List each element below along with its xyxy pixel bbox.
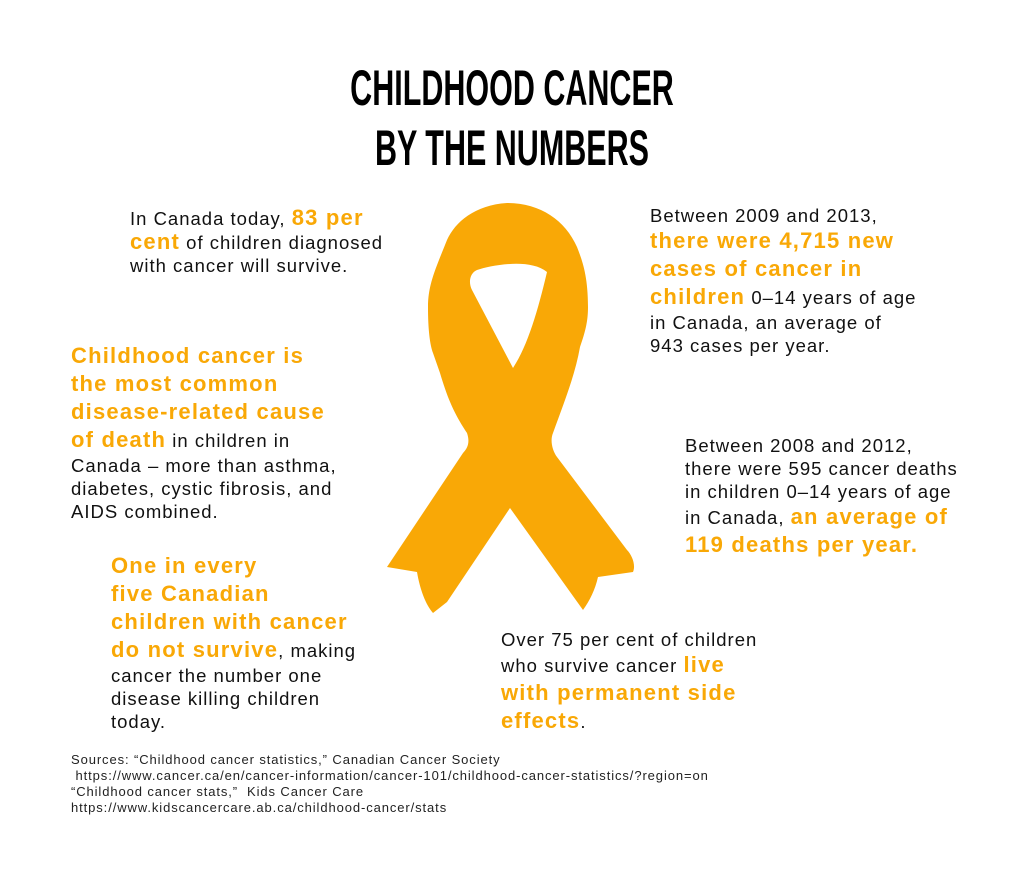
text: 4,715 cases: 943 cases per year. — [650, 335, 830, 356]
text: 595 deaths: Between 2008 and 2012, — [685, 435, 913, 456]
text: 595 deaths — [685, 435, 958, 557]
text: 75 per cent: with permanent side — [501, 680, 737, 705]
text: 4,715 cases: there were 4,715 new — [650, 228, 894, 253]
text: 83 per cent: In Canada today, 83 per — [130, 205, 364, 230]
text: 595 deaths: 119 deaths per year. — [685, 532, 918, 557]
text: 4,715 cases: in Canada, an average of — [650, 312, 882, 333]
text: one in five: One in every — [111, 553, 257, 578]
text: most common cause of death — [71, 343, 337, 522]
text: 75 per cent: Over 75 per cent of children — [501, 629, 757, 650]
title: CHILDHOOD CANCER — [350, 60, 674, 116]
text: most common cause of death: AIDS combined. — [71, 501, 219, 522]
text: 595 deaths: in Canada, an average of — [685, 504, 948, 529]
text: 83 per cent: with cancer will survive. — [130, 255, 348, 276]
text: 4,715 cases — [650, 205, 916, 356]
text: 75 per cent: effects. — [501, 708, 586, 733]
title — [350, 60, 674, 176]
text: one in five: today. — [111, 711, 166, 732]
text: 595 deaths: in children 0–14 years of age — [685, 481, 952, 502]
text: 4,715 cases: Between 2009 and 2013, — [650, 205, 878, 226]
sources: “Childhood cancer stats,” Kids Cancer Care — [71, 784, 364, 799]
text: most common cause of death: of death in children in — [71, 427, 290, 452]
text: one in five: disease killing children — [111, 688, 320, 709]
text: 4,715 cases: cases of cancer in — [650, 256, 862, 281]
text: 83 per cent: cent of children diagnosed — [130, 229, 383, 254]
text: most common cause of death: diabetes, cystic fibrosis, and — [71, 478, 332, 499]
title: BY THE NUMBERS — [375, 120, 649, 176]
text: one in five: cancer the number one — [111, 665, 322, 686]
sources: https://www.cancer.ca/en/cancer-information/cancer-101/childhood-cancer-statistics/?region=on — [76, 768, 709, 783]
sources — [71, 752, 709, 815]
text: one in five: do not survive, making — [111, 637, 356, 662]
text: 75 per cent: who survive cancer live — [501, 652, 725, 677]
text: most common cause of death: Canada – more than asthma, — [71, 455, 337, 476]
sources: Sources: “Childhood cancer statistics,” Canadian Cancer Society — [71, 752, 501, 767]
text: 595 deaths: there were 595 cancer deaths — [685, 458, 958, 479]
text: 83 per cent — [130, 205, 383, 276]
sources: https://www.kidscancercare.ab.ca/childhood-cancer/stats — [71, 800, 447, 815]
text: most common cause of death: the most common — [71, 371, 278, 396]
text: most common cause of death: Childhood cancer is — [71, 343, 304, 368]
text: most common cause of death: disease-related cause — [71, 399, 325, 424]
text: one in five: five Canadian — [111, 581, 270, 606]
text: 4,715 cases: children 0–14 years of age — [650, 284, 916, 309]
text: one in five: children with cancer — [111, 609, 348, 634]
text: one in five — [111, 553, 356, 732]
text: 75 per cent — [501, 629, 757, 733]
